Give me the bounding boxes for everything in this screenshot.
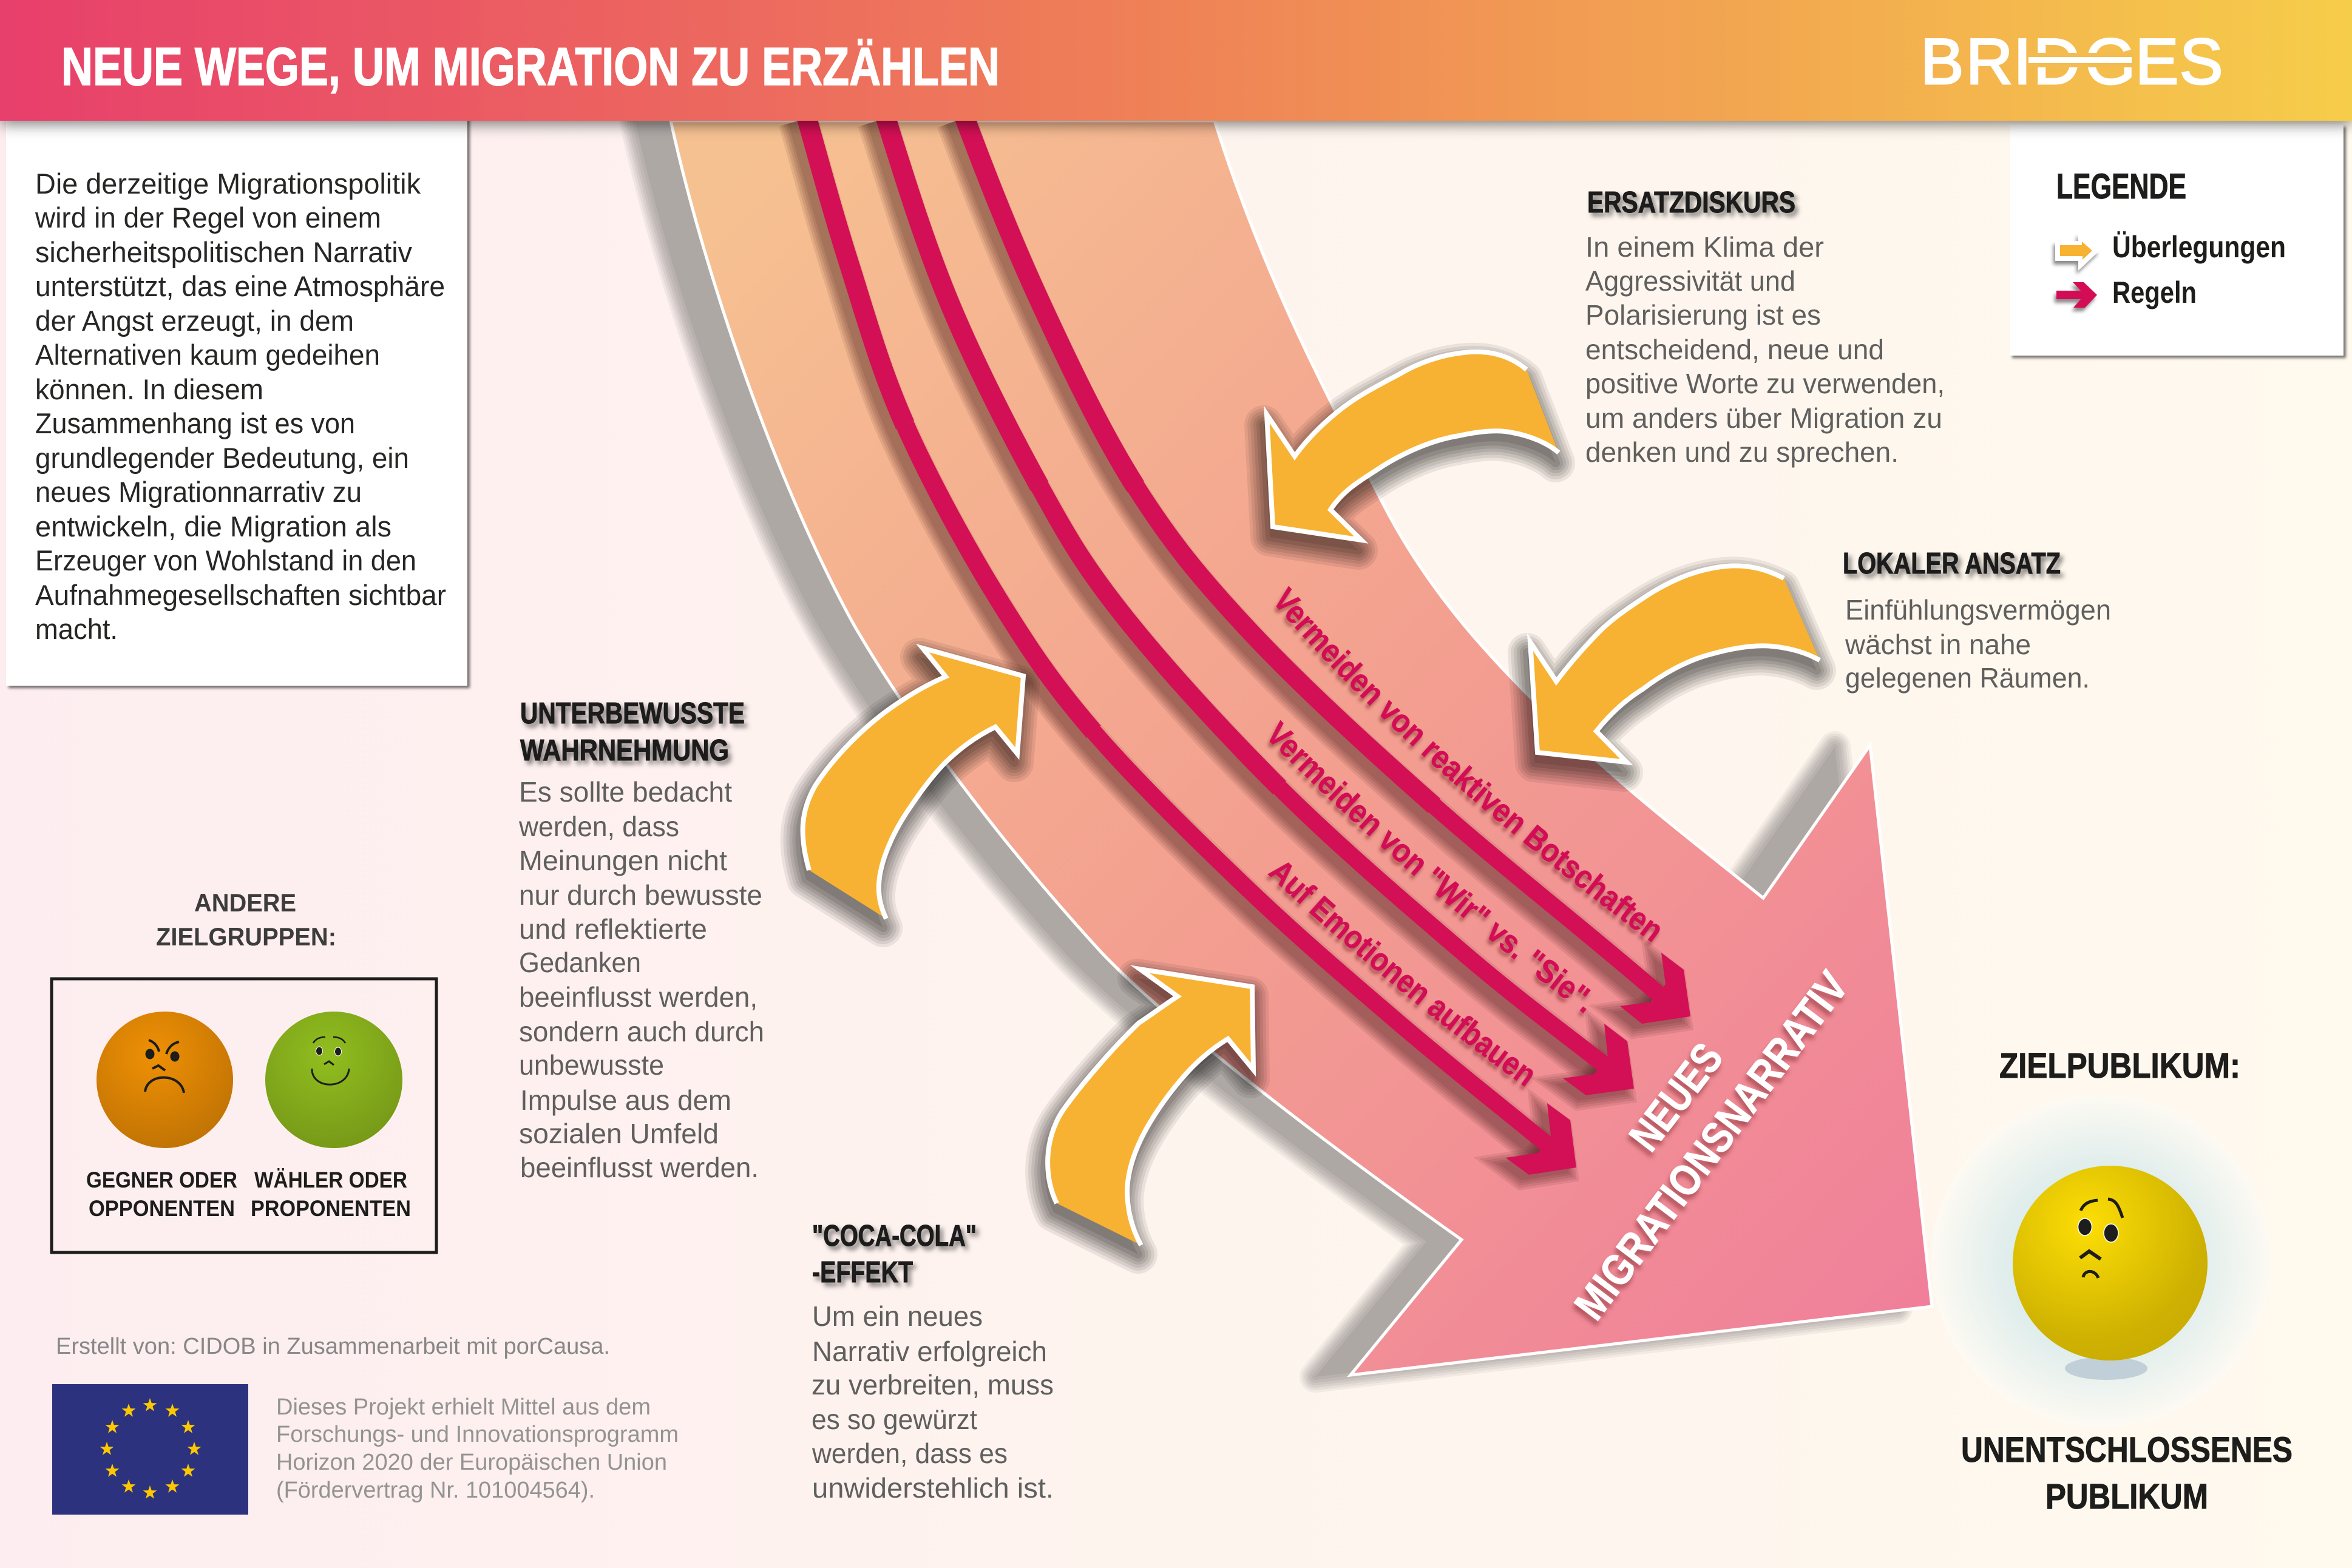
heading: Coca-Cola-Effekt: -EFFEKT <box>812 1256 913 1289</box>
arrow title: Neues Migrationsnarrativ: MIGRATIONSNARRATIV <box>1565 962 1858 1329</box>
intro text: Zusammenhang ist es von <box>35 407 355 439</box>
text: Coca-Cola-Effekt: Narrativ erfolgreich <box>812 1336 1047 1367</box>
intro text: der Angst erzeugt, in dem <box>35 305 354 337</box>
text: Ersatzdiskurs: denken und zu sprechen. <box>1585 436 1899 468</box>
text: Unterbewusste Wahrnehmung: werden, dass <box>518 811 679 842</box>
text: Ersatzdiskurs: entscheidend, neue und <box>1585 334 1884 365</box>
text: Ersatzdiskurs <box>1585 231 1945 468</box>
label: Gegner oder Opponenten <box>86 1168 237 1221</box>
text: Ersatzdiskurs: In einem Klima der <box>1585 231 1824 263</box>
panel: introduction text box <box>6 115 467 686</box>
text: Lokaler Ansatz: Einfühlungsvermögen <box>1845 594 2111 626</box>
panel: legend <box>2010 124 2344 356</box>
text: Coca-Cola-Effekt: unwiderstehlich ist. <box>812 1472 1054 1504</box>
orange arrow: Unterbewusste Wahrnehmung <box>800 648 1023 928</box>
arrow title: Neues Migrationsnarrativ: NEUES <box>1620 1034 1732 1160</box>
label: Gegner oder Opponenten: OPPONENTEN <box>89 1196 235 1221</box>
label: Wähler oder Proponenten: WÄHLER ODER <box>254 1168 407 1192</box>
label: undecided audience: UNENTSCHLOSSENES <box>1961 1430 2293 1470</box>
intro text: können. In diesem <box>35 373 263 405</box>
heading: Andere Zielgruppen <box>156 888 336 951</box>
heading: Coca-Cola-Effekt: "COCA-COLA" <box>812 1220 977 1252</box>
credit line: Erstellt von: CIDOB in Zusammenarbeit mit porCausa. <box>56 1334 610 1359</box>
header band <box>0 0 2352 121</box>
icon: angry orange face <box>97 1012 233 1148</box>
text: Ersatzdiskurs: Aggressivität und <box>1585 265 1795 297</box>
intro text: sicherheitspolitischen Narrativ <box>35 236 412 268</box>
main arrow: new migration narrative <box>635 121 1932 1377</box>
icon: happy green face <box>265 1012 402 1148</box>
text: Ersatzdiskurs: um anders über Migration zu <box>1585 402 1942 434</box>
title: NEUE WEGE, UM MIGRATION ZU ERZÄHLEN <box>61 36 1000 96</box>
intro text: Erzeuger von Wohlstand in den <box>35 544 416 576</box>
intro text: unterstützt, das eine Atmosphäre <box>35 270 445 302</box>
label: undecided audience: PUBLIKUM <box>2045 1477 2208 1516</box>
orange arrow: Lokaler Ansatz <box>1527 566 1820 772</box>
label: Wähler oder Proponenten: PROPONENTEN <box>251 1196 411 1221</box>
intro text: Alternativen kaum gedeihen <box>35 339 380 371</box>
legend title: LEGENDE <box>2056 167 2186 206</box>
text: Unterbewusste Wahrnehmung: und reflektierte <box>519 913 707 945</box>
text: Ersatzdiskurs: Polarisierung ist es <box>1585 299 1821 331</box>
orange arrow: Coca-Cola-Effekt <box>1045 969 1253 1254</box>
heading: Unterbewusste Wahrnehmung: WAHRNEHMUNG <box>520 734 729 767</box>
intro text: entwickeln, die Migration als <box>35 510 391 542</box>
heading: Lokaler Ansatz: LOKALER ANSATZ <box>1843 547 2061 580</box>
text: Unterbewusste Wahrnehmung: beeinflusst werden, <box>519 981 757 1013</box>
label: Wähler oder Proponenten <box>251 1168 411 1221</box>
icon: EU flag <box>52 1384 248 1515</box>
legend icon: orange arrow <box>2055 232 2100 271</box>
text: Coca-Cola-Effekt: zu verbreiten, muss <box>812 1369 1054 1401</box>
intro text: Aufnahmegesellschaften sichtbar <box>35 579 446 611</box>
legend icon: crimson arrow <box>2056 282 2097 308</box>
text: Lokaler Ansatz: gelegenen Räumen. <box>1845 662 2090 694</box>
intro text: wird in der Regel von einem <box>35 201 381 234</box>
rule arrows: three crimson lines <box>798 115 1690 1180</box>
heading: Zielpublikum: ZIELPUBLIKUM: <box>1999 1046 2240 1086</box>
icon: undecided yellow face with halo <box>1931 1095 2271 1427</box>
text: EU funding note: Forschungs- und Innovationsprogramm <box>276 1422 679 1447</box>
heading: Andere Zielgruppen: ANDERE <box>194 888 296 917</box>
text: Unterbewusste Wahrnehmung: unbewusste <box>519 1049 664 1081</box>
text: Coca-Cola-Effekt: Um ein neues <box>812 1300 983 1332</box>
panel: other audiences box <box>52 979 436 1252</box>
intro text: grundlegender Bedeutung, ein <box>35 442 409 474</box>
heading: Ersatzdiskurs: ERSATZDISKURS <box>1587 186 1795 219</box>
text: EU funding note: (Fördervertrag Nr. 101004564). <box>276 1478 595 1503</box>
text: EU funding note: Horizon 2020 der Europäischen Union <box>276 1450 667 1475</box>
intro text: macht. <box>35 613 118 645</box>
text: Unterbewusste Wahrnehmung: Meinungen nicht <box>519 845 727 876</box>
text: Coca-Cola-Effekt: werden, dass es <box>812 1438 1008 1469</box>
text: Coca-Cola-Effekt: es so gewürzt <box>812 1404 977 1435</box>
heading: Unterbewusste Wahrnehmung: UNTERBEWUSSTE <box>520 697 745 730</box>
text: Unterbewusste Wahrnehmung: sozialen Umfeld <box>519 1118 719 1149</box>
heading: Coca-Cola-Effekt <box>812 1220 977 1289</box>
intro text <box>35 167 446 645</box>
rule labels along the crimson lines: Vermeiden von "Wir" vs. "Sie". <box>1266 720 1591 1018</box>
text: EU funding note: Dieses Projekt erhielt Mittel aus dem <box>276 1394 651 1420</box>
heading: Andere Zielgruppen: ZIELGRUPPEN: <box>156 922 336 951</box>
legend label: Überlegungen: Überlegungen <box>2112 230 2286 264</box>
orange arrow: Ersatzdiskurs <box>1264 352 1559 550</box>
text: Unterbewusste Wahrnehmung: sondern auch durch <box>519 1016 764 1047</box>
logo: Bridges: BRIDGES <box>1920 25 2223 98</box>
text: Unterbewusste Wahrnehmung: Es sollte bedacht <box>519 776 732 808</box>
intro text: neues Migrationnarrativ zu <box>35 476 362 508</box>
text: Unterbewusste Wahrnehmung: Impulse aus dem <box>520 1084 731 1116</box>
text: Coca-Cola-Effekt <box>812 1300 1054 1504</box>
text: Ersatzdiskurs: positive Worte zu verwenden, <box>1585 368 1945 399</box>
text: Unterbewusste Wahrnehmung: beeinflusst werden. <box>520 1152 759 1183</box>
text: Unterbewusste Wahrnehmung: nur durch bewusste <box>519 879 762 911</box>
rule labels along the crimson lines: Vermeiden von reaktiven Botschaften <box>1273 586 1660 947</box>
text: Unterbewusste Wahrnehmung <box>518 776 764 1183</box>
label: Gegner oder Opponenten: GEGNER ODER <box>86 1168 237 1192</box>
heading: Unterbewusste Wahrnehmung <box>520 697 745 767</box>
rule labels along the crimson lines: Auf Emotionen aufbauen <box>1265 862 1533 1091</box>
text: Lokaler Ansatz <box>1845 594 2111 694</box>
text: Unterbewusste Wahrnehmung: Gedanken <box>519 947 641 978</box>
legend label: Regeln: Regeln <box>2112 275 2197 309</box>
rule labels along the crimson lines <box>1265 586 1660 1091</box>
text: EU funding note <box>276 1394 679 1503</box>
intro text: Die derzeitige Migrationspolitik <box>35 167 421 200</box>
text: Lokaler Ansatz: wächst in nahe <box>1845 629 2031 660</box>
label: undecided audience <box>1961 1430 2293 1516</box>
